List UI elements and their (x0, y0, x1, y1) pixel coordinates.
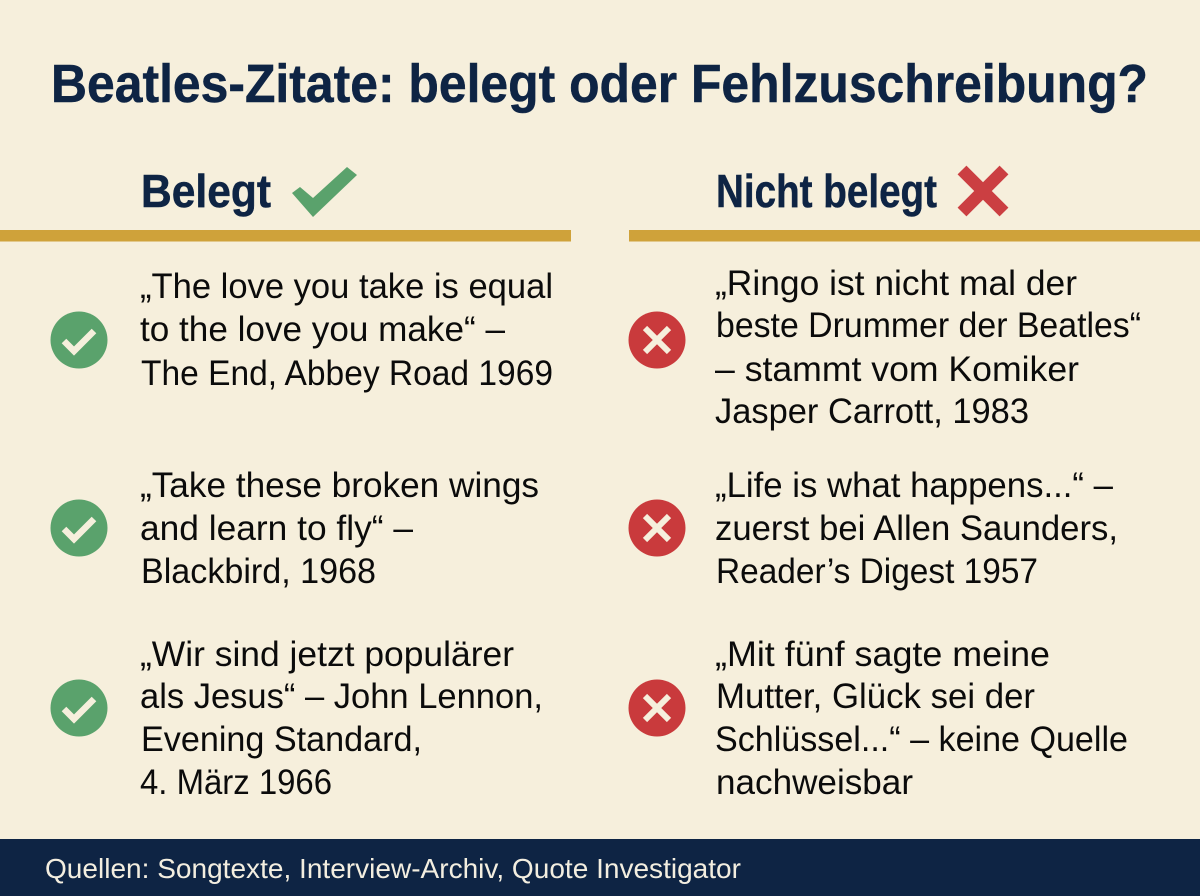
text: false quote 1: beste Drummer der Beatles“ (716, 306, 1141, 345)
text: false quote 3: nachweisbar (716, 763, 913, 802)
footer: sources: Quellen: Songtexte, Interview-Archiv, Quote Investigator (45, 853, 741, 884)
text: false quote 1: – stammt vom Komiker (715, 350, 1079, 389)
gold rule left (0, 230, 571, 242)
item: Life is what happens (628, 466, 1118, 591)
icon: check circle 1 (50, 312, 108, 368)
text: false quote 2: Reader’s Digest 1957 (716, 552, 1038, 591)
text: false quote 3: „Mit fünf sagte meine (715, 635, 1050, 674)
item: Ringo (628, 264, 1141, 431)
footer bar (0, 839, 1200, 896)
text: quote 3: 4. März 1966 (140, 763, 332, 802)
text: quote 2: Blackbird, 1968 (141, 552, 376, 591)
item: Mit fuenf (628, 635, 1128, 802)
text: quote 1: to the love you make“ – (140, 310, 506, 349)
text: quote 2 (140, 466, 539, 591)
text: quote 3 (140, 635, 543, 802)
text: false quote 2 (715, 466, 1118, 591)
icon: cross circle 1 (628, 312, 686, 368)
heading: belegt: Belegt (141, 165, 271, 217)
text: quote 2: and learn to fly“ – (140, 509, 414, 548)
panel: nicht belegt (628, 165, 1200, 802)
text: false quote 1: „Ringo ist nicht mal der (715, 264, 1077, 303)
text: false quote 2: zuerst bei Allen Saunders, (715, 509, 1118, 548)
item: love you take (50, 267, 553, 393)
text: quote 3: „Wir sind jetzt populärer (140, 635, 514, 674)
text: false quote 2: „Life is what happens...“ – (715, 466, 1114, 505)
text: quote 1 (140, 267, 553, 393)
icon: cross circle 3 (628, 680, 686, 736)
icon: large red cross (962, 170, 1004, 212)
item: broken wings (50, 466, 539, 591)
text: false quote 3: Mutter, Glück sei der (716, 677, 1035, 716)
text: false quote 3: Schlüssel...“ – keine Quelle (715, 720, 1128, 759)
icon: check circle 3 (50, 680, 108, 736)
panel: belegt (0, 165, 571, 802)
text: false quote 1: Jasper Carrott, 1983 (715, 392, 1029, 431)
icon: check circle 2 (50, 500, 108, 556)
text: quote 3: als Jesus“ – John Lennon, (140, 677, 543, 716)
item: populaerer als Jesus (50, 635, 543, 802)
text: false quote 3 (715, 635, 1128, 802)
heading: nicht belegt: Nicht belegt (716, 165, 937, 217)
text: false quote 1 (715, 264, 1141, 431)
icon: cross circle 2 (628, 500, 686, 556)
text: quote 3: Evening Standard, (141, 720, 422, 759)
text: quote 1: The End, Abbey Road 1969 (141, 354, 553, 393)
icon: large green check (292, 167, 357, 217)
text: quote 1: „The love you take is equal (140, 267, 553, 306)
text: quote 2: „Take these broken wings (140, 466, 539, 505)
gold rule right (629, 230, 1200, 242)
